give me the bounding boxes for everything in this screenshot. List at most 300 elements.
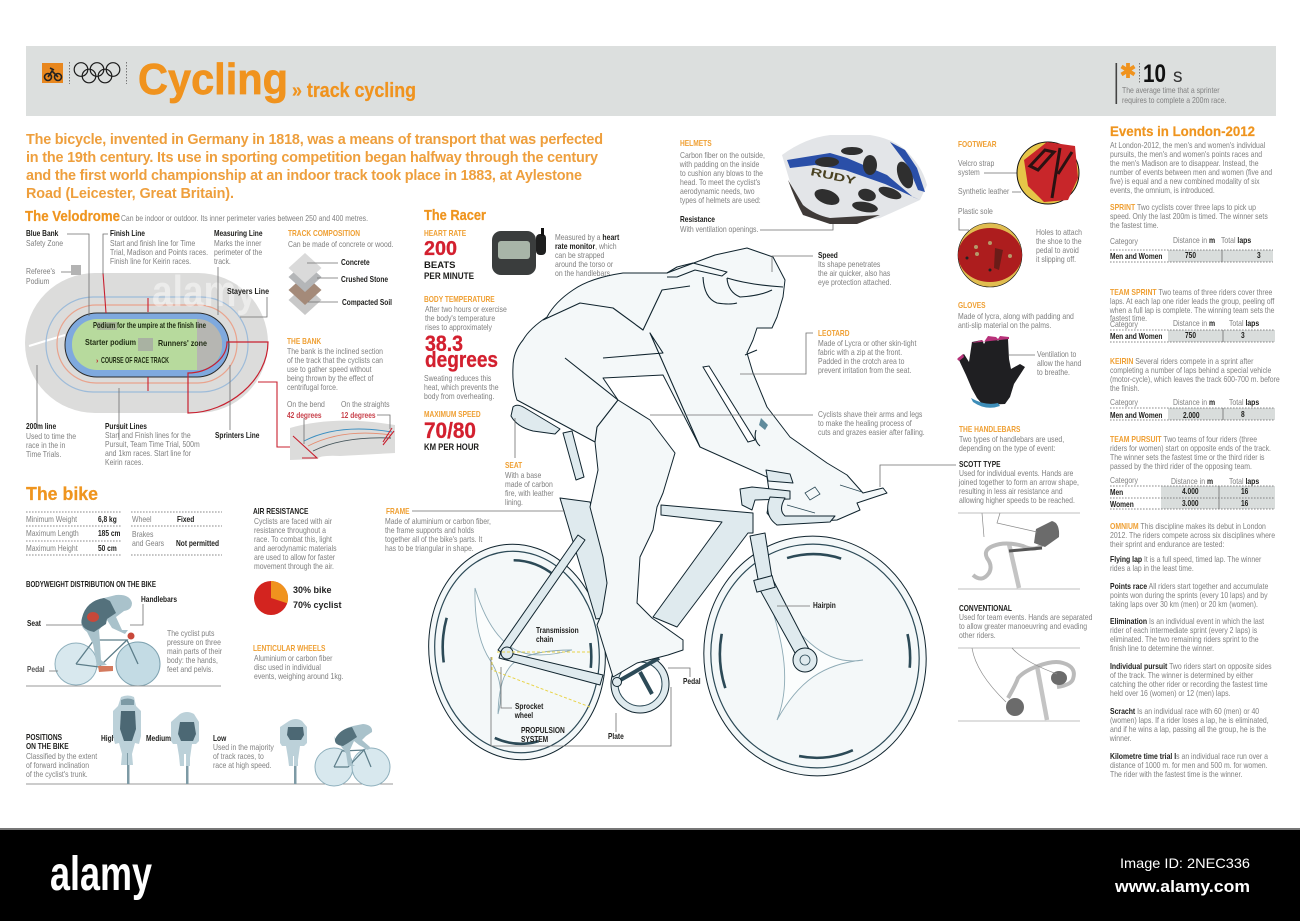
omnium event: rides a lap in the least time. — [1110, 563, 1194, 573]
positions on the bike: POSITIONS — [26, 732, 62, 742]
helmets: head. To meet the cyclist's — [680, 177, 760, 187]
helmets: Carbon fiber on the outside, — [680, 150, 765, 160]
velodrome labels: track. — [214, 256, 231, 266]
icon: heart rate monitor — [492, 228, 546, 275]
heart rate monitor text: can be strapped — [555, 250, 604, 260]
speed helmet note: the air quicker, also has — [818, 268, 890, 278]
handlebars: SCOTT TYPE — [959, 459, 1001, 469]
watermark footer bar — [0, 828, 1300, 921]
bike specs table: Maximum Length — [26, 528, 79, 538]
heart rate — [424, 228, 474, 282]
shoe top photo — [1017, 142, 1079, 204]
omnium event: rider of each intermediate sprint (every 2 laps) is — [1110, 625, 1257, 635]
lenticular wheels: disc used in individual — [254, 662, 321, 672]
velodrome track diagram — [25, 265, 290, 447]
gloves: Ventilation to — [1037, 349, 1076, 359]
omnium event: distance of 1000 m. for men and 500 m. for women. — [1110, 760, 1268, 770]
bicycle callouts: Hairpin — [813, 600, 836, 610]
positions on the bike — [26, 696, 393, 786]
bicycle callouts: Made of aluminium or carbon fiber, — [385, 516, 491, 526]
bodyweight distribution: pressure on three — [167, 637, 221, 647]
panel: events in London 2012 — [1109, 123, 1280, 779]
footwear: Synthetic leather — [958, 186, 1010, 196]
team pursuit event: Category — [1110, 475, 1138, 485]
maximum speed: KM PER HOUR — [424, 442, 479, 453]
panel: events in London 2012: Events in London-2012 — [1110, 123, 1255, 139]
figure: medium position — [171, 712, 199, 784]
velodrome labels: Finish Line — [110, 228, 145, 238]
sprint event: Men and Women — [1110, 251, 1163, 261]
glove photo — [957, 336, 1025, 408]
chainring — [611, 655, 669, 713]
bodyweight distribution — [26, 579, 222, 686]
bicycle callouts: lining. — [505, 497, 523, 507]
bodyweight distribution: The cyclist puts — [167, 628, 215, 638]
sprint event: the fastest time. — [1110, 220, 1159, 230]
saddle — [511, 405, 560, 434]
positions on the bike: of track races, to — [213, 751, 264, 761]
bodyweight distribution: Seat — [27, 618, 41, 628]
figure: scott handlebar — [958, 513, 1080, 589]
omnium event: and if he wins a lap, passing all the group, he is the — [1110, 724, 1266, 734]
air resistance: and aerodynamic materials — [254, 543, 337, 553]
positions on the bike: ON THE BIKE — [26, 741, 69, 751]
frame tubes — [498, 431, 817, 685]
bodyweight distribution: Handlebars — [141, 594, 177, 604]
leotard note — [740, 328, 917, 375]
lenticular wheels: LENTICULAR WHEELS — [253, 643, 325, 653]
callout: 10 seconds: s — [1173, 66, 1182, 87]
team sprint event: Distance in m — [1173, 318, 1215, 328]
track composition: Concrete — [341, 257, 370, 267]
footwear: Holes to attach — [1036, 227, 1082, 237]
speed helmet note: Speed — [818, 250, 838, 260]
positions on the bike: Low — [213, 733, 226, 743]
track composition: Compacted Soil — [342, 297, 392, 307]
velodrome track diagram: › — [96, 358, 99, 365]
bodyweight distribution: main parts of their — [167, 646, 222, 656]
intro text: in the 19th century. Its use in sporting competition began halfway through the century — [26, 150, 598, 166]
the bank: use to gather speed without — [287, 364, 372, 374]
keirin event — [1110, 356, 1280, 420]
helmet photo — [782, 135, 927, 224]
body temperature: After two hours or exercise — [425, 304, 507, 314]
panel: events in London 2012: events, the omnium, is introduced. — [1110, 185, 1215, 195]
figure: side view rider on bike — [55, 595, 160, 686]
omnium event: held over 16 (women) or 12 (men) laps. — [1110, 688, 1230, 698]
sprint event: Distance in m — [1173, 235, 1215, 245]
bodyweight distribution: body: the hands, — [167, 655, 218, 665]
team pursuit event: Distance in m — [1171, 476, 1213, 486]
track composition: Crushed Stone — [341, 274, 388, 284]
figure: low position side view — [315, 724, 390, 786]
keirin event: (motor-cycle), which leaves the track 600-700 m. before — [1110, 374, 1280, 384]
velodrome track diagram: Stayers Line — [227, 286, 269, 296]
handlebars: Two types of handlebars are used, — [959, 434, 1064, 444]
panel: events in London 2012: number of events between men and women (five and — [1110, 167, 1272, 177]
bicycle callouts: Pedal — [683, 676, 701, 686]
maximum speed — [424, 409, 481, 453]
velodrome track diagram: alamy — [152, 267, 257, 316]
velodrome labels: Podium — [26, 276, 49, 286]
velodrome track diagram: COURSE OF RACE TRACK — [101, 355, 169, 365]
keirin event: KEIRIN Several riders compete in a sprint after — [1110, 356, 1254, 366]
team pursuit event — [1110, 434, 1275, 509]
omnium event: catching the other rider or recording the fastest time — [1110, 679, 1268, 689]
team pursuit event: 4.000 — [1182, 486, 1199, 496]
positions on the bike: race at high speed. — [213, 760, 272, 770]
team pursuit event: Total laps — [1229, 476, 1259, 486]
keirin event: Men and Women — [1110, 410, 1163, 420]
speed helmet note: eye protection attached. — [818, 277, 891, 287]
heart rate monitor text — [555, 232, 620, 278]
watermark footer bar: alamy — [50, 848, 152, 901]
transmission chain — [492, 652, 592, 707]
icon: cycling pictogram — [42, 63, 63, 83]
velodrome labels: Safety Zone — [26, 238, 63, 248]
body temperature: Sweating reduces this — [424, 373, 491, 383]
velodrome labels — [26, 228, 267, 467]
heading: The bike: The bike — [26, 484, 98, 504]
pie chart: 30% bike, 70% cyclist: 70% cyclist — [293, 600, 342, 610]
rear wheel — [416, 534, 618, 770]
body temperature: 38.3 — [425, 331, 463, 356]
helmets — [679, 138, 833, 234]
speed helmet note: Its shape penetrates — [818, 259, 880, 269]
cyclist body outline — [513, 248, 887, 677]
air resistance: are used to allow for faster — [254, 552, 335, 562]
heading: The Racer: The Racer — [424, 207, 486, 224]
the bank: On the straights — [341, 399, 390, 409]
handlebars: depending on the type of event: — [959, 443, 1055, 453]
pie chart: 30% bike, 70% cyclist — [254, 581, 342, 615]
velodrome labels: Time Trials. — [26, 449, 61, 459]
figure: high position — [113, 696, 141, 784]
bike specs table: Fixed — [177, 514, 195, 524]
team sprint event: 750 — [1185, 330, 1196, 340]
velodrome labels: Pursuit Lines — [105, 421, 147, 431]
omnium event: eliminated. The two remaining riders sprint to the — [1110, 634, 1259, 644]
helmets: Resistance — [680, 214, 715, 224]
lenticular wheels: Aluminium or carbon fiber — [254, 653, 333, 663]
heart rate: PER MINUTE — [424, 271, 474, 282]
watermark footer bar: Image ID: 2NEC336 — [1120, 855, 1250, 871]
team pursuit event: passed by the third rider of the opposing team. — [1110, 461, 1252, 471]
heart rate: HEART RATE — [424, 228, 466, 238]
velodrome labels: Measuring Line — [214, 228, 263, 238]
handlebars: to allow greater manoeuvring and evading — [959, 621, 1087, 631]
handlebars: joined together to form an arrow shape, — [958, 477, 1079, 487]
omnium event: OMNIUM This discipline makes its debut in London — [1110, 521, 1266, 531]
handlebars: allowing higher speeds to be reached. — [959, 495, 1075, 505]
positions on the bike: of forward inclination — [26, 760, 89, 770]
bike specs table: 185 cm — [98, 528, 121, 538]
team pursuit event: riders for women) start on opposite ends of the track. — [1110, 443, 1271, 453]
body temperature: body from overheating. — [424, 391, 494, 401]
bicycle callouts: wheel — [514, 710, 533, 720]
bicycle illustration — [416, 248, 942, 790]
gloves: allow the hand — [1037, 358, 1081, 368]
omnium event: Points race All riders start together and accumulate — [1110, 581, 1268, 591]
bike specs table — [26, 512, 222, 555]
lenticular wheels — [253, 643, 344, 681]
velodrome labels: Finish line for Keirin races. — [110, 256, 191, 266]
handlebar — [740, 418, 862, 525]
team pursuit event: 3.000 — [1182, 498, 1199, 508]
team pursuit event: Women — [1110, 499, 1134, 509]
header band — [26, 46, 1276, 116]
bicycle callouts: SYSTEM — [521, 734, 548, 744]
heart rate monitor text: on the handlebars. — [555, 268, 612, 278]
omnium event: Individual pursuit Two riders start on opposite sides — [1110, 661, 1272, 671]
intro text: The bicycle, invented in Germany in 1818, was a means of transport that was perfected — [26, 132, 603, 148]
omnium event: (women) laps. If a rider loses a lap, he is eliminated, — [1110, 715, 1269, 725]
helmet photo: RUDY — [809, 166, 858, 188]
gloves: to breathe. — [1037, 367, 1070, 377]
velodrome labels: Marks the inner — [214, 238, 262, 248]
velodrome labels: perimeter of the — [214, 247, 262, 257]
sprint event — [1110, 202, 1273, 262]
body temperature: the body's temperature — [425, 313, 495, 323]
shaving note: Cyclists shave their arms and legs — [818, 409, 923, 419]
velodrome track diagram: Runners' zone — [158, 338, 207, 348]
velodrome labels: 200m line — [26, 421, 56, 431]
velodrome labels: Blue Bank — [26, 228, 59, 238]
track composition: TRACK COMPOSITION — [288, 228, 360, 238]
callout: 10 seconds — [1116, 60, 1226, 105]
bodyweight distribution: BODYWEIGHT DISTRIBUTION ON THE BIKE — [26, 579, 156, 589]
sprint event: speed. Only the last 200m is timed. The winner sets — [1110, 211, 1268, 221]
handlebars: Used for team events. Hands are separated — [959, 612, 1092, 622]
team sprint event — [1109, 287, 1275, 342]
heart rate monitor text: around the torso or — [555, 259, 614, 269]
velodrome labels: Used to time the — [26, 431, 76, 441]
bike specs table: Brakes — [132, 529, 154, 539]
the bank: The bank is the inclined section — [287, 346, 383, 356]
team sprint event: Total laps — [1229, 318, 1259, 328]
bicycle callouts: chain — [536, 634, 554, 644]
omnium event: of the track. The winner is determined by either — [1110, 670, 1254, 680]
front wheel — [688, 522, 942, 790]
omnium event: Flying lap It is a full speed, timed lap. The winner — [1110, 554, 1262, 564]
the bank: of the track that the cyclists can — [287, 355, 383, 365]
bicycle callouts: the frame supports and holds — [385, 525, 474, 535]
footwear: pedal to avoid — [1036, 245, 1079, 255]
omnium event: their sprint and endurance are tested: — [1110, 539, 1224, 549]
team sprint event: fastest time. — [1110, 313, 1147, 323]
team pursuit event: TEAM PURSUIT Two teams of four riders (three — [1110, 434, 1257, 444]
body temperature: rises to approximately — [425, 322, 492, 332]
keirin event: Category — [1110, 397, 1138, 407]
team pursuit event: 16 — [1241, 498, 1248, 508]
bicycle callouts: SEAT — [505, 460, 522, 470]
team pursuit event: Men — [1110, 487, 1124, 497]
keirin event: the finish. — [1110, 383, 1139, 393]
bike specs table: 50 cm — [98, 543, 117, 553]
positions on the bike: High — [101, 733, 116, 743]
sprint event: SPRINT Two cyclists cover three laps to pick up — [1110, 202, 1256, 212]
omnium event: finish line to determine the winner. — [1110, 643, 1214, 653]
footwear: it slipping off. — [1036, 254, 1076, 264]
handlebars: other riders. — [959, 630, 996, 640]
heart rate: BEATS — [424, 260, 456, 271]
figure: low position — [280, 719, 307, 784]
omnium event: Scracht Is an individual race with 60 (men) or 40 — [1110, 706, 1259, 716]
footwear — [958, 139, 1082, 287]
the bank: being thrown by the effect of — [287, 373, 374, 383]
omnium event: winner. — [1109, 733, 1132, 743]
the bank: centrifugal force. — [287, 382, 338, 392]
body temperature: heat, which prevents the — [424, 382, 499, 392]
bike specs table: Not permitted — [176, 538, 219, 548]
positions on the bike: Used in the majority — [213, 742, 274, 752]
velodrome labels: Trial, Madison and Points races. — [110, 247, 208, 257]
bike specs table: and Gears — [132, 538, 164, 548]
intro text — [26, 132, 603, 202]
the bank: On the bend — [287, 399, 325, 409]
positions on the bike: Medium — [146, 733, 171, 743]
callout: 10 seconds: requires to complete a 200m race. — [1122, 95, 1226, 105]
sprint event: 750 — [1185, 250, 1196, 260]
team sprint event: TEAM SPRINT Two teams of three riders cover three — [1110, 287, 1272, 297]
footwear: system — [958, 167, 980, 177]
sprint event: Category — [1110, 236, 1138, 246]
handlebars: CONVENTIONAL — [959, 603, 1012, 613]
team sprint event: Category — [1110, 319, 1138, 329]
heart rate monitor text: Measured by a heart — [555, 232, 620, 242]
leotard note: Made of Lycra or other skin-tight — [818, 338, 917, 348]
omnium event: Kilometre time trial Is an individual race run over a — [1110, 751, 1269, 761]
panel: events in London 2012: pursuits, the men's and women's points races and — [1110, 149, 1262, 159]
the bank — [287, 336, 395, 460]
omnium event: taking laps over 30 km (men) or 20 km (women). — [1110, 599, 1258, 609]
heart rate monitor text: rate monitor, which — [555, 241, 617, 251]
gloves: Made of lycra, along with padding and — [958, 311, 1074, 321]
footwear: Plastic sole — [958, 206, 993, 216]
velodrome track diagram: Podium for the umpire at the finish line — [93, 320, 206, 330]
shaving note — [650, 409, 925, 437]
gloves — [957, 300, 1081, 408]
air resistance: Cyclists are faced with air — [254, 516, 332, 526]
positions on the bike: of the cyclist's trunk. — [26, 769, 88, 779]
helmets: HELMETS — [680, 138, 712, 148]
track composition — [288, 228, 394, 315]
maximum speed: 70/80 — [424, 418, 476, 443]
body temperature: BODY TEMPERATURE — [424, 294, 495, 304]
sprint event: 3 — [1257, 250, 1261, 260]
velodrome labels: Keirin races. — [105, 457, 143, 467]
body temperature — [424, 294, 507, 401]
callout: 10 seconds: 10 — [1143, 60, 1166, 88]
bodyweight distribution: feet and pelvis. — [167, 664, 213, 674]
omnium event: points won during the sprints (every 10 laps) and by — [1110, 590, 1268, 600]
velodrome track diagram: Starter podium — [85, 337, 136, 347]
velodrome labels: Sprinters Line — [215, 430, 259, 440]
bike specs table: Wheel — [132, 514, 152, 524]
heading: The Velodrome: The Velodrome — [25, 208, 120, 225]
subtitle: » track cycling — [292, 80, 416, 102]
panel: events in London 2012: At London-2012, the men's and women's individual — [1110, 140, 1265, 150]
leotard note: prevent irritation from the seat. — [818, 365, 911, 375]
handlebars: resulting in less air resistance and — [959, 486, 1063, 496]
bike specs table: 6,8 kg — [98, 514, 117, 524]
maximum speed: MAXIMUM SPEED — [424, 409, 481, 419]
shaving note: to make the healing process of — [818, 418, 912, 428]
bike specs table: Maximum Height — [26, 543, 78, 553]
keirin event: completing a number of laps behind a special vehicle — [1110, 365, 1271, 375]
pie chart: 30% bike, 70% cyclist: 30% bike — [293, 585, 332, 595]
heart rate: 200 — [424, 238, 457, 260]
velodrome labels: race in the in — [26, 440, 65, 450]
bicycle callouts: Plate — [608, 731, 624, 741]
omnium event: Elimination Is an individual event in which the last — [1110, 616, 1265, 626]
air resistance: resistance throughout a — [254, 525, 327, 535]
team pursuit event: The winner sets the fastest time or the third rider is — [1110, 452, 1265, 462]
bicycle callouts: With a base — [505, 470, 541, 480]
keirin event: Distance in m — [1173, 397, 1215, 407]
cyclist inner contour lines — [543, 263, 783, 447]
panel: events in London 2012: the men's Madison are to disappear. Instead, the — [1110, 158, 1259, 168]
bicycle callouts: fire, with leather — [505, 488, 554, 498]
air resistance — [253, 506, 337, 571]
team sprint event: 3 — [1241, 330, 1245, 340]
handlebars: Used for individual events. Hands are — [959, 468, 1073, 478]
team sprint event: laps. At each lap one rider leads the group, peeling off — [1110, 296, 1275, 306]
the bank: 42 degrees — [287, 410, 322, 420]
bicycle callouts: Sprocket — [515, 701, 544, 711]
gloves: GLOVES — [958, 300, 986, 310]
helmets: With ventilation openings. — [680, 224, 758, 234]
velodrome labels: and 1km races. Start line for — [105, 448, 191, 458]
team sprint event: Men and Women — [1110, 331, 1163, 341]
velodrome subtitle: Can be indoor or outdoor. Its inner perimeter varies between 250 and 400 metres. — [121, 213, 368, 223]
omnium event — [1109, 521, 1275, 779]
keirin event: 8 — [1241, 409, 1245, 419]
bicycle callouts: has to be triangular in shape. — [385, 543, 474, 553]
callout: 10 seconds: The average time that a sprinter — [1122, 85, 1220, 95]
panel: events in London 2012: five) is equal and a new combined modality of six — [1110, 176, 1260, 186]
footwear: the shoe to the — [1036, 236, 1082, 246]
body temperature: degrees — [425, 347, 498, 372]
bicycle callouts: Transmission — [536, 625, 579, 635]
air resistance: race. To combat this, light — [254, 534, 333, 544]
title: Cycling — [138, 55, 288, 104]
positions on the bike: Classified by the extent — [26, 751, 98, 761]
helmets: types of helmets are used: — [680, 195, 761, 205]
velodrome labels: Pursuit, Team Time Trial, 500m — [105, 439, 200, 449]
bicycle callouts: together all of the bike's parts. It — [385, 534, 483, 544]
keirin event: Total laps — [1229, 397, 1259, 407]
white gap between arm and chest — [703, 366, 755, 442]
velodrome labels: Start and Finish lines for the — [105, 430, 191, 440]
footwear: FOOTWEAR — [958, 139, 997, 149]
shoe sole photo — [958, 223, 1022, 287]
omnium event: The rider with the fastest time is the winner. — [1110, 769, 1242, 779]
intro text: Road (Leicester, Great Britain). — [26, 186, 234, 202]
the bank: 12 degrees — [341, 410, 376, 420]
bicycle callouts: made of carbon — [505, 479, 553, 489]
bicycle callouts: PROPULSION — [521, 725, 565, 735]
velodrome labels: Referee's — [26, 266, 55, 276]
bicycle callouts: FRAME — [386, 506, 410, 516]
speed helmet note — [772, 250, 891, 287]
helmets: to cushion any blows to the — [680, 168, 763, 178]
track composition: Can be made of concrete or wood. — [288, 239, 394, 249]
handlebars: THE HANDLEBARS — [959, 424, 1020, 434]
icon: olympic rings — [70, 62, 126, 84]
handlebars — [880, 424, 1092, 721]
helmets: aerodynamic needs, two — [680, 186, 755, 196]
